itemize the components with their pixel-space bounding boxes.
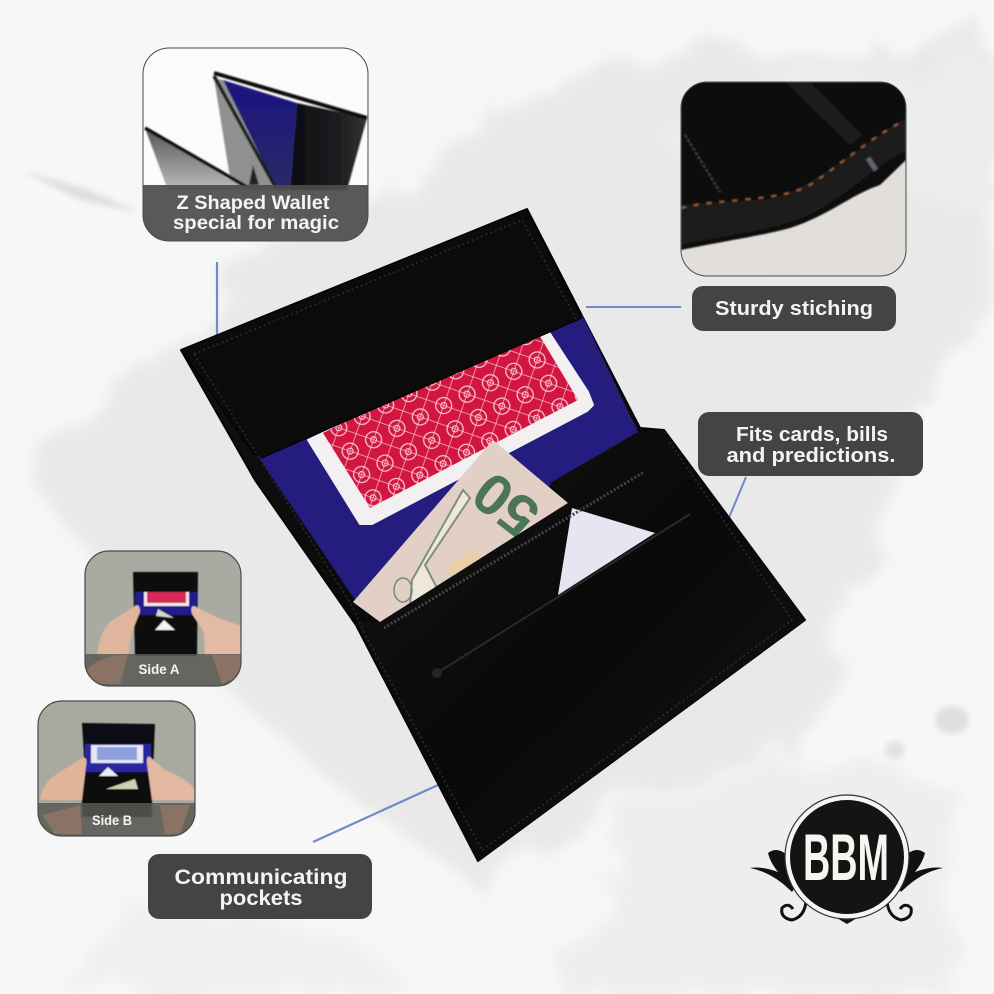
label: sturdy stitching: Sturdy stiching	[715, 298, 873, 320]
panel outline	[85, 551, 241, 686]
caption	[173, 193, 339, 234]
wallet leather body	[181, 209, 805, 861]
top flap	[181, 209, 582, 458]
label: fits cards: Fits cards, bills	[736, 424, 888, 446]
white triangle note	[558, 508, 655, 595]
front pocket with zipper	[356, 430, 805, 861]
label: sturdy stitching	[692, 286, 896, 331]
logo badge	[785, 795, 909, 919]
connector line: fits cards	[728, 477, 746, 520]
logo: BBM	[750, 795, 943, 924]
caption: special for magic	[173, 213, 339, 234]
zipper	[384, 472, 644, 628]
logo wings	[750, 850, 943, 924]
photo: hands holding wallet side A	[85, 551, 241, 686]
panel outline	[143, 48, 368, 241]
photo: folded wallet	[144, 70, 368, 240]
playing card	[308, 326, 593, 524]
photo: stitched leather	[681, 82, 906, 276]
label: communicating pockets	[148, 854, 372, 919]
panel: side A	[85, 551, 241, 686]
caption: Side A	[138, 662, 180, 677]
pocket slit and rivet	[432, 514, 690, 678]
caption: Side B	[92, 813, 132, 828]
stitching	[194, 220, 792, 850]
panel outline	[681, 82, 906, 276]
label: fits cards: and predictions.	[726, 445, 896, 467]
panel: Z shaped wallet	[143, 48, 368, 241]
panel outline	[38, 701, 195, 836]
50 dollar bill: 50	[461, 459, 551, 550]
50 dollar bill	[353, 440, 568, 622]
logo letters: BBM	[803, 820, 889, 894]
photo: hands holding wallet side B	[38, 701, 195, 836]
connector line: communicating pockets	[313, 785, 438, 842]
panel: side B	[38, 701, 195, 836]
panel: stitching photo	[681, 82, 906, 276]
connector line: Z shaped wallet	[216, 262, 218, 336]
label: fits cards	[698, 412, 923, 476]
main wallet photo	[181, 209, 805, 861]
blue lining	[258, 314, 638, 603]
label: communicating pockets: Communicating	[174, 866, 348, 889]
connector line: sturdy stitching	[586, 306, 681, 308]
label: communicating pockets: pockets	[220, 887, 302, 910]
caption: Z Shaped Wallet	[176, 193, 330, 214]
